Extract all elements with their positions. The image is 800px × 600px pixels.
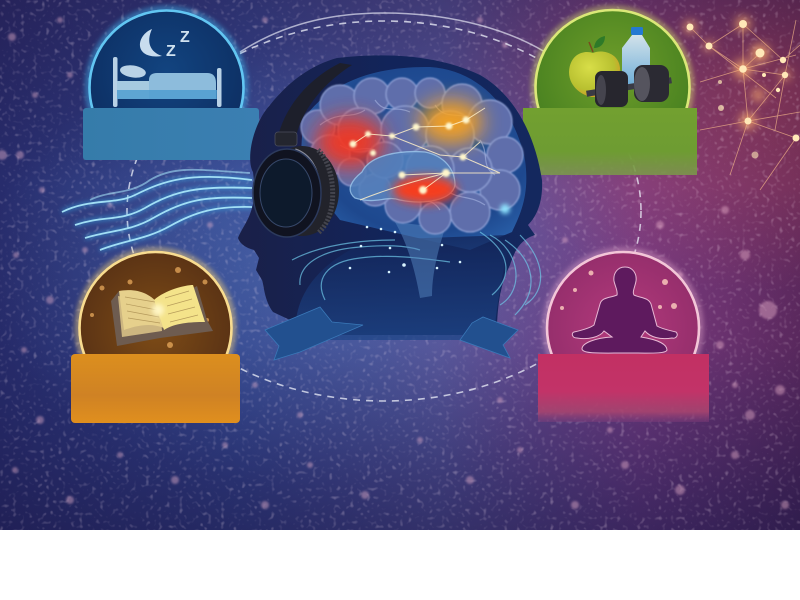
left ribbon xyxy=(265,307,363,360)
constellation dots in lower head xyxy=(349,226,461,273)
card: meditation xyxy=(538,247,709,422)
neural nodes xyxy=(350,116,470,194)
right ribbon xyxy=(460,317,518,358)
neural pathways xyxy=(353,108,500,200)
glow: red left region xyxy=(316,116,384,168)
headphone band xyxy=(280,63,352,134)
glow: red lower region xyxy=(393,176,457,204)
central head with brain xyxy=(238,55,542,360)
icon: apple xyxy=(569,36,620,97)
headphones xyxy=(253,63,352,237)
icon: moon xyxy=(140,29,162,56)
icon: sleeping letters xyxy=(166,31,190,56)
card: reading xyxy=(71,247,240,423)
icon: sleeping letters: Z xyxy=(180,29,190,46)
headphone ear cup xyxy=(253,149,321,237)
glass dome of skull xyxy=(300,67,526,250)
icon: meditating figure xyxy=(572,267,677,353)
card: sleep xyxy=(83,6,259,170)
icon: water bottle xyxy=(622,27,650,85)
sound waves left of head xyxy=(62,170,252,250)
neural lines in lower head xyxy=(292,232,541,315)
label panel: sleep xyxy=(83,108,259,160)
glow: orange upper region xyxy=(419,100,483,144)
head silhouette xyxy=(238,55,542,335)
icon: bed xyxy=(113,57,222,107)
temporal lobe xyxy=(350,152,455,202)
card: nutrition and exercise xyxy=(523,5,697,175)
icon: open book xyxy=(111,285,213,346)
icon: dumbbell xyxy=(586,65,672,107)
label panel: nutrition and exercise xyxy=(523,108,697,175)
label panel: meditation xyxy=(538,354,709,422)
icon: sleeping letters: Z xyxy=(166,43,176,60)
neck and shoulders inner glow xyxy=(296,235,510,340)
network constellation top right xyxy=(684,17,800,190)
cyan glow at back of brain xyxy=(500,204,510,214)
brain stem xyxy=(395,222,445,298)
label panel: reading xyxy=(71,354,240,423)
orbit rings around head xyxy=(127,13,641,401)
headphone outer cup xyxy=(290,146,339,236)
brain xyxy=(301,78,523,234)
